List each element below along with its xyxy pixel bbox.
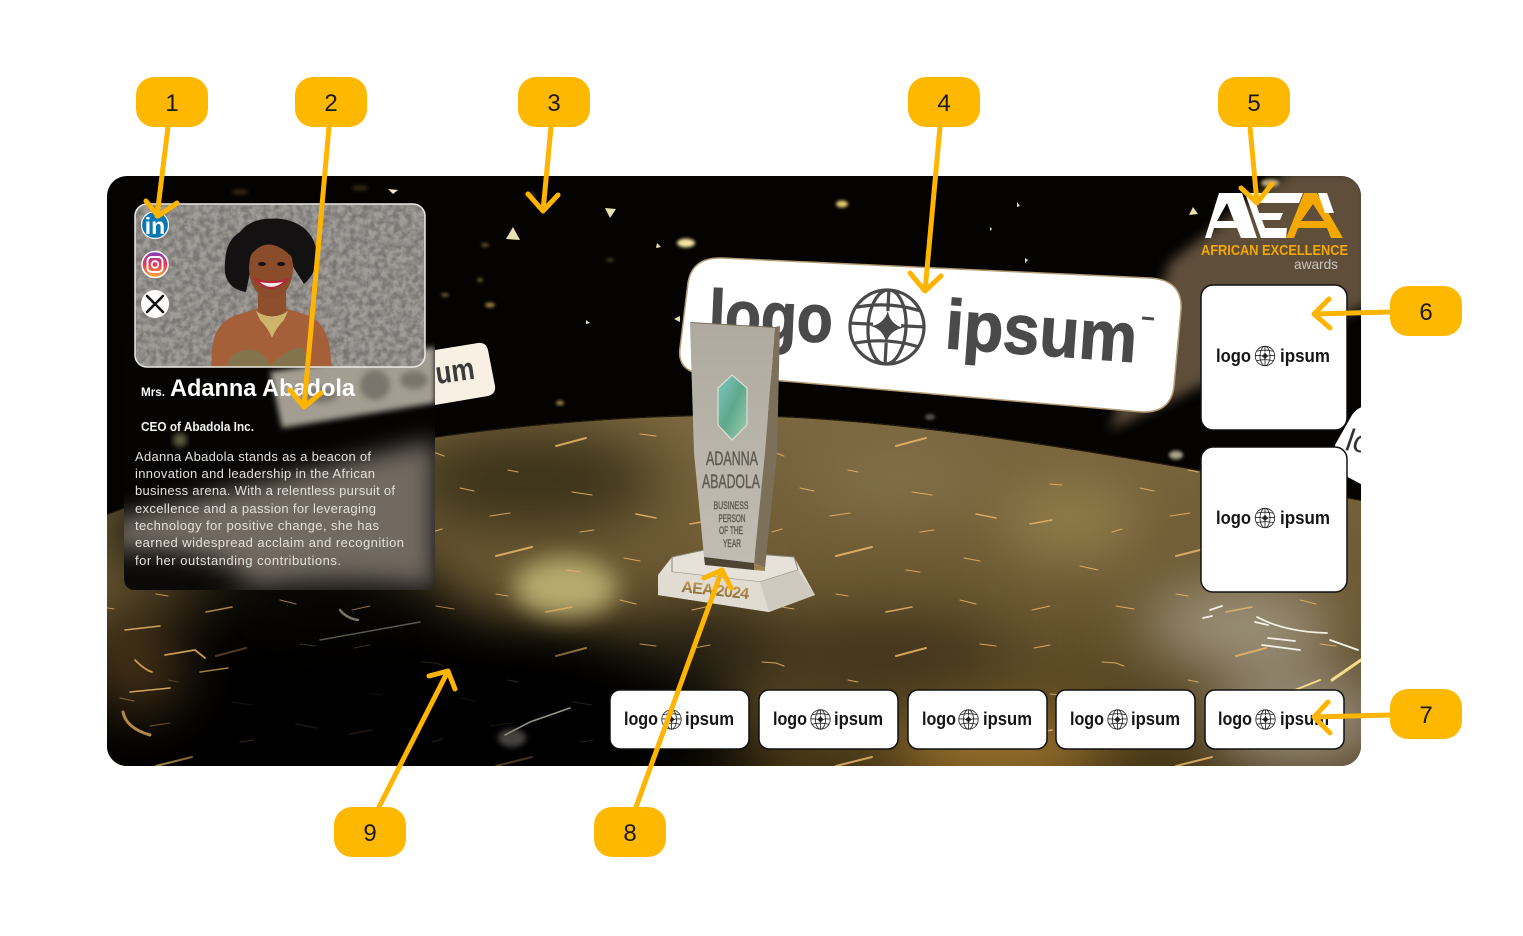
callout 8: 8 [623, 820, 637, 847]
sponsor strip tile 5 [1205, 690, 1344, 749]
profile panel [10, 204, 470, 631]
biography: Adanna Abadola stands as a beacon of [135, 449, 371, 464]
sponsor strip tile 2: logo [773, 709, 807, 729]
brown glow on left edge [85, 617, 185, 713]
woman [212, 219, 331, 367]
callout 8 [594, 570, 731, 857]
sponsor strip tile 5: logo [1218, 709, 1252, 729]
callout 3 [518, 77, 590, 211]
sponsor strip [610, 690, 1344, 749]
icon: instagram [142, 252, 168, 278]
callout 4: 4 [937, 90, 951, 117]
trophy [658, 322, 815, 612]
sponsor strip tile 3: logo [922, 709, 956, 729]
job title: CEO of Abadola Inc. [141, 420, 254, 434]
sponsor strip tile 2: ipsum [834, 709, 883, 729]
icon: x [141, 290, 169, 318]
main logo card: logo ipsum [680, 258, 1181, 412]
trophy inscription: PERSON [718, 513, 746, 525]
cream card behind profile panel: um [433, 351, 477, 391]
sponsor strip tile 5: ipsum [1280, 709, 1329, 729]
confetti triangles [388, 189, 1198, 324]
callout 5: 5 [1247, 90, 1261, 117]
AEA logo: awards [1294, 256, 1338, 272]
callout 2 [290, 77, 367, 407]
AEA logo [1201, 193, 1348, 272]
callout 3: 3 [547, 90, 561, 117]
brown light beam [1110, 170, 1370, 430]
callout 7: 7 [1419, 702, 1433, 729]
annotated infographic [107, 77, 1462, 857]
bright marble veins [123, 606, 1361, 735]
callouts [136, 77, 1462, 857]
biography: business arena. With a relentless pursuit of [135, 483, 395, 498]
bokeh lights [232, 179, 1279, 460]
biography: technology for positive change, she has [135, 518, 380, 533]
callout 7 [1314, 689, 1462, 739]
sponsor strip tile 3 [908, 690, 1047, 749]
sponsor tile 1: ipsum [1280, 346, 1330, 366]
sponsor tile 1 [1201, 285, 1347, 430]
sponsor strip tile 4: ipsum [1131, 709, 1180, 729]
callout 1 [136, 77, 208, 216]
trophy base [658, 550, 815, 612]
sponsor strip tile 4 [1056, 690, 1195, 749]
name: Adanna Abadola [170, 375, 356, 402]
cream card behind profile panel [433, 343, 495, 405]
sponsor strip tile 1 [610, 690, 749, 749]
frosted backdrop [124, 343, 435, 590]
callout 6 [1314, 286, 1462, 336]
callout 2: 2 [324, 90, 338, 117]
main logo card: logo ipsum: ipsum [943, 285, 1140, 377]
photo frame [135, 204, 425, 367]
trophy inscription: BUSINESS [714, 500, 748, 512]
biography: for her outstanding contributions. [135, 553, 341, 568]
far right partial logo card [1335, 407, 1361, 484]
callout 1: 1 [165, 90, 179, 117]
sponsor strip tile 1: logo [624, 709, 658, 729]
sponsor tile 1: logo [1216, 346, 1251, 366]
callout 5 [1218, 77, 1290, 203]
trophy inscription: OF THE [719, 525, 743, 537]
stage background [107, 176, 1361, 766]
main logo card: logo ipsum: logo [707, 276, 835, 357]
callout 4 [908, 77, 980, 291]
biography: excellence and a passion for leveraging [135, 501, 376, 516]
biography: earned widespread acclaim and recognition [135, 535, 404, 550]
sponsor tile 2 [1201, 447, 1347, 592]
biography: innovation and leadership in the African [135, 466, 375, 481]
gold marble table [107, 415, 1361, 766]
biography [135, 449, 404, 568]
sponsor strip tile 1: ipsum [685, 709, 734, 729]
sponsor tile 2: ipsum [1280, 508, 1330, 528]
name: Mrs. [141, 385, 165, 399]
trophy gem [718, 375, 747, 440]
AEA logo: AFRICAN EXCELLENCE [1201, 243, 1348, 259]
icon: linkedin: in [145, 213, 165, 239]
callout 9 [334, 671, 455, 857]
trophy inscription: YEAR [723, 538, 741, 550]
sponsor tile 2: logo [1216, 508, 1251, 528]
trophy body [690, 322, 780, 571]
trophy inscription: ADANNA [706, 449, 758, 470]
far right partial logo card: lo [1344, 422, 1373, 460]
trophy inscription: ABADOLA [702, 472, 760, 493]
sponsor strip tile 3: ipsum [983, 709, 1032, 729]
trophy inscription [702, 449, 760, 550]
trophy base: AEA 2024 [681, 579, 750, 603]
callout 9: 9 [363, 820, 377, 847]
sponsor strip tile 4: logo [1070, 709, 1104, 729]
sponsor strip tile 2 [759, 690, 898, 749]
callout 6: 6 [1419, 299, 1433, 326]
portrait photo [135, 204, 425, 367]
